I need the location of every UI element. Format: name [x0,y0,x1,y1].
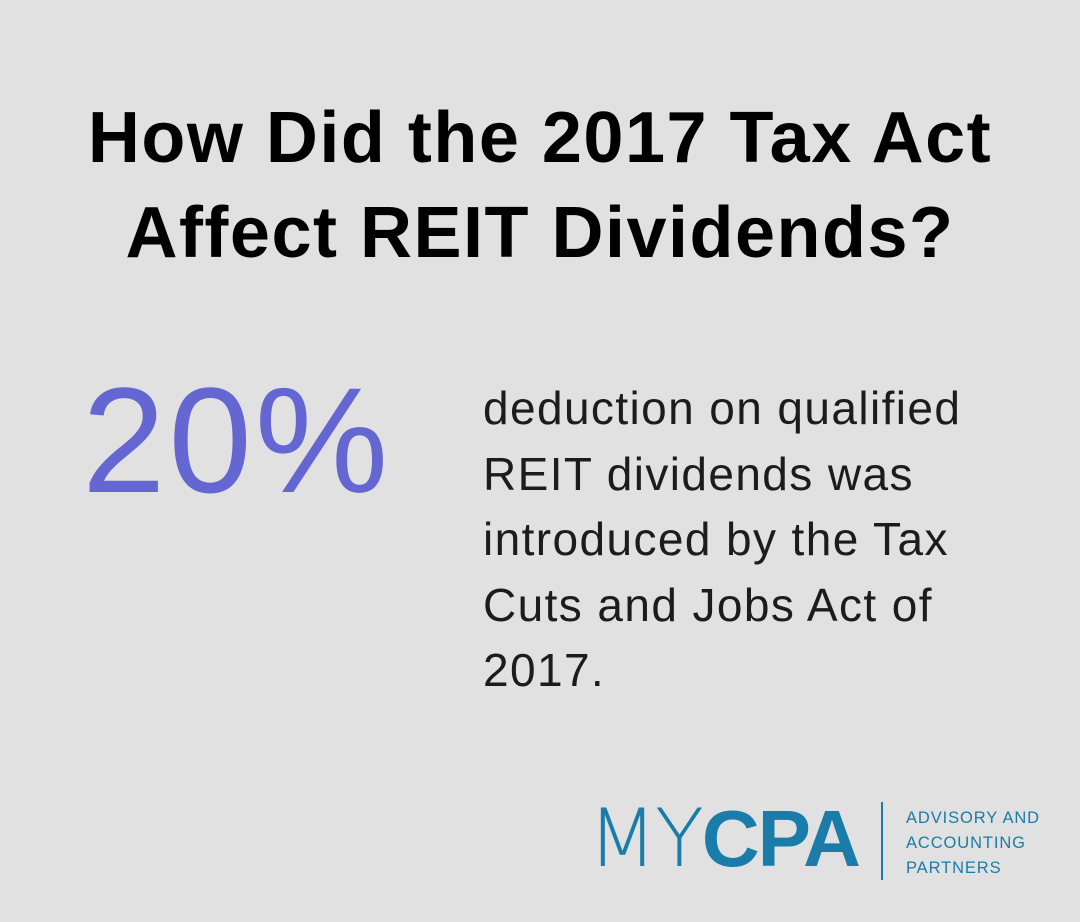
stat description [483,382,961,696]
stat description: REIT dividends was [483,448,914,500]
logo [588,792,1040,885]
logo tagline: ACCOUNTING [906,834,1026,852]
logo wordmark: MYCPA [588,792,859,885]
logo tagline: PARTNERS [906,859,1002,877]
stat description: deduction on qualified [483,382,961,434]
title [88,98,992,273]
big stat: 20% [82,356,391,524]
stat description: 2017. [483,644,605,696]
title: Affect REIT Dividends? [125,193,955,273]
stat description: Cuts and Jobs Act of [483,578,933,630]
stat description: introduced by the Tax [483,513,949,565]
logo tagline: ADVISORY AND [906,809,1040,827]
logo divider [881,802,883,880]
logo tagline [906,809,1040,877]
title: How Did the 2017 Tax Act [88,98,992,178]
